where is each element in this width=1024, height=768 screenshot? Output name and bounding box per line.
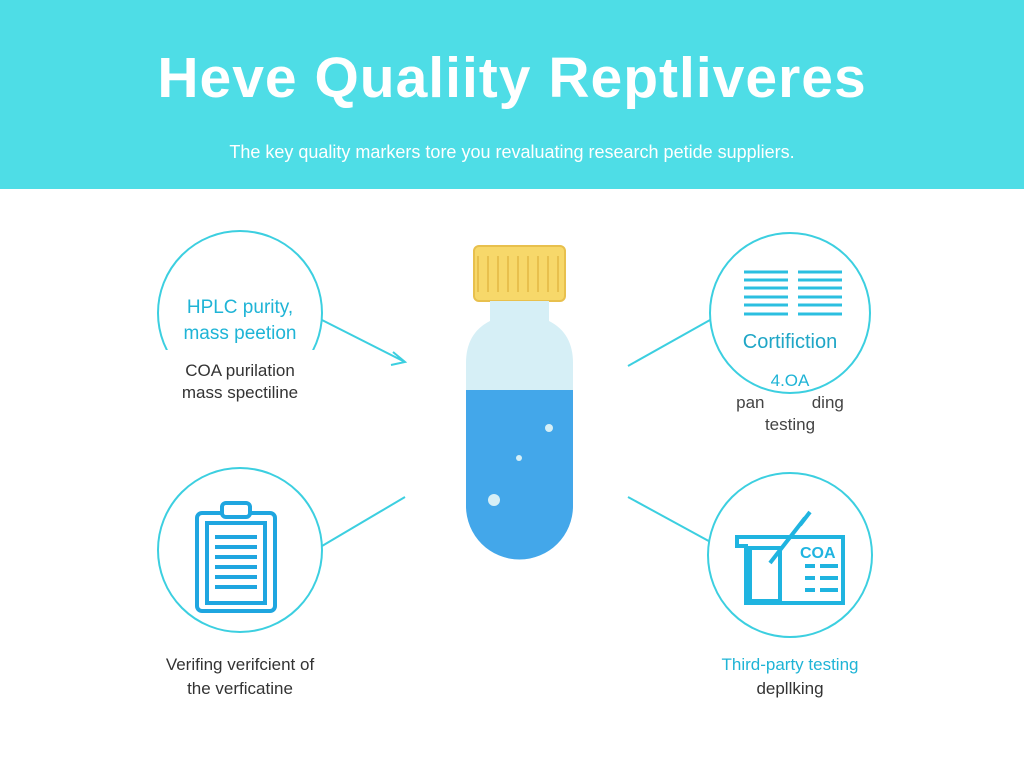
text: verification: the verficatine bbox=[187, 679, 293, 698]
text: verification: Verifing verifcient of bbox=[166, 655, 314, 674]
circle: COA third-party: COA bbox=[800, 545, 836, 562]
text: HPLC purity: mass peetion bbox=[183, 323, 296, 344]
circle: COA third-party bbox=[708, 473, 872, 637]
text: 4.OA testing bbox=[736, 371, 844, 434]
text: third-party testing: Third-party testing bbox=[722, 655, 858, 674]
text: COA purification: mass spectiline bbox=[182, 383, 298, 402]
icon: COA document with pen bbox=[737, 512, 843, 603]
circle: certification bbox=[710, 233, 870, 393]
text: 4.OA testing: 4.OA bbox=[771, 371, 809, 390]
header banner bbox=[0, 0, 1024, 189]
text: third-party testing bbox=[722, 655, 858, 698]
text: certification: Cortifiction bbox=[743, 331, 837, 353]
icon: clipboard bbox=[197, 503, 275, 611]
circle: HPLC purity bbox=[158, 231, 322, 410]
text: COA purification bbox=[182, 361, 298, 402]
subtitle: The key quality markers tore you revaluating research petide suppliers. bbox=[229, 142, 795, 162]
title: Heve Qualiity Reptliveres bbox=[157, 46, 867, 110]
text: 4.OA testing: testing bbox=[765, 415, 815, 434]
connector lines bbox=[318, 318, 716, 546]
vial bbox=[466, 246, 573, 560]
text: COA purification: COA purilation bbox=[185, 361, 295, 380]
text: third-party testing: depllking bbox=[756, 679, 824, 698]
text: verification bbox=[166, 655, 314, 698]
text: HPLC purity bbox=[183, 297, 296, 344]
text: 4.OA testing: pan ding bbox=[736, 393, 844, 412]
icon: document lines bbox=[744, 272, 842, 314]
text: HPLC purity: HPLC purity, bbox=[187, 297, 293, 318]
circle: clipboard bbox=[158, 468, 322, 632]
